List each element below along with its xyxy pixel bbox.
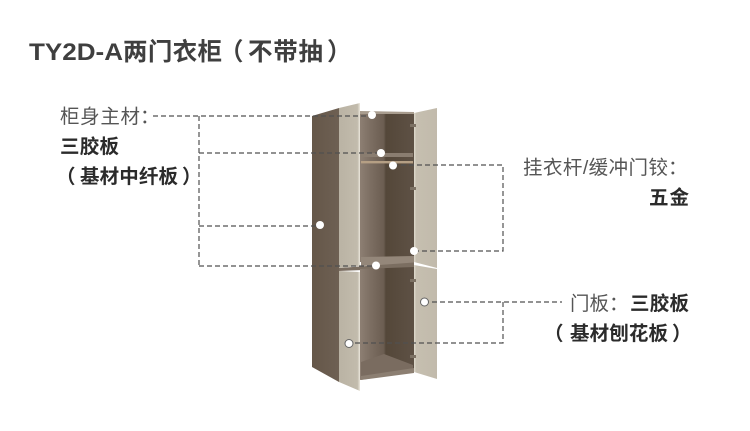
callout: hardware: 五金: [649, 186, 689, 209]
callout: cabinet body material: 三胶板: [60, 135, 119, 158]
title: ）: [327, 38, 352, 66]
hinges: [410, 124, 416, 358]
left upper door: [339, 103, 360, 268]
title: TY2D-A: [29, 39, 123, 66]
title: （: [219, 38, 244, 66]
callout: cabinet body material: （: [56, 166, 76, 188]
title: 不带抽: [248, 38, 323, 66]
hanging rail: [361, 161, 413, 163]
callout: cabinet body material: ）: [182, 166, 202, 188]
callout: door material: [544, 292, 692, 345]
callout: cabinet body material: 柜身主材: [60, 106, 140, 128]
leader lines: [153, 116, 562, 343]
title: [29, 38, 352, 66]
upper shelf: [361, 153, 413, 157]
callout: door material: （: [544, 323, 564, 345]
callout: door material: 三胶板: [630, 292, 689, 315]
right upper door: [414, 108, 437, 268]
title: 两门衣柜: [123, 38, 222, 66]
callout: cabinet body material: ：: [140, 106, 160, 128]
callout: door material: 基材刨花板: [570, 322, 668, 345]
cabinet floor: [361, 354, 413, 379]
callout: hardware: ：: [668, 157, 688, 179]
callout: hardware: 挂衣杆/缓冲门铰: [523, 157, 668, 179]
callout: cabinet body material: 基材中纤板: [80, 165, 178, 188]
callout: hardware: [523, 157, 689, 209]
cabinet top edge: [360, 111, 414, 114]
callout: door material: ）: [672, 323, 692, 345]
cabinet interior lower: [360, 267, 414, 380]
cabinet interior upper: [360, 112, 414, 262]
marker dots: [316, 111, 428, 348]
callout: door material: ：: [609, 293, 629, 315]
callout: cabinet body material: [56, 106, 202, 188]
wardrobe illustration: [312, 103, 437, 391]
callout: door material: 门板: [570, 293, 609, 315]
cabinet side panel: [312, 108, 339, 382]
cabinet middle shelf: [361, 256, 414, 266]
right lower door: [414, 265, 437, 379]
left lower door: [339, 271, 360, 391]
